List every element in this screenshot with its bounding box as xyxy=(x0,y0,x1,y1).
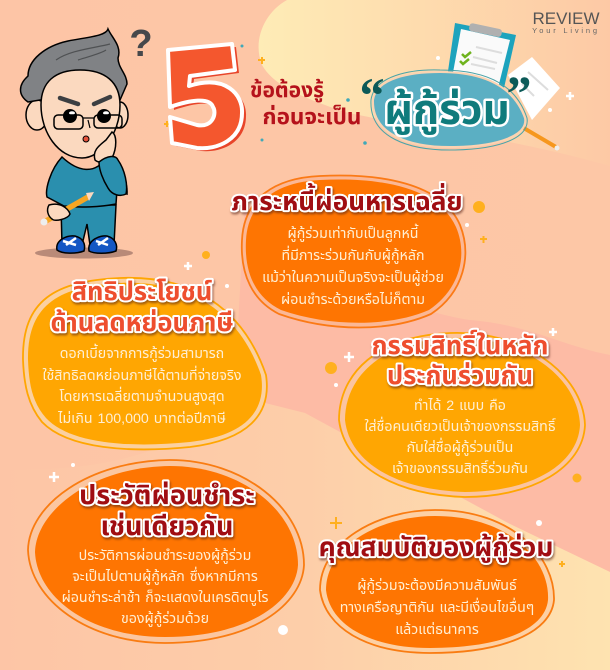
body text: จะเป็นไปตามผู้กู้หลัก ซึ่งหากมีการ xyxy=(72,566,258,585)
panel: กรรมสิทธิ์ในหลักประกันร่วมกัน xyxy=(339,330,585,497)
body text: ไม่เกิน 100,000 บาทต่อปีภาษี xyxy=(57,410,226,427)
body text: ที่มีภาระร่วมกันกับผู้กู้หลัก xyxy=(282,245,424,264)
raised arm xyxy=(99,156,127,195)
heading: สิทธิประโยชน์ xyxy=(72,278,212,306)
body text: ของผู้กู้ร่วมด้วย xyxy=(121,610,209,627)
body text xyxy=(43,343,241,427)
shadow xyxy=(35,248,133,258)
heading: ภาระหนี้ผ่อนหารเฉลี่ย xyxy=(231,183,463,216)
body text: โดยหารเฉลี่ยตามจำนวนสูงสุด xyxy=(59,386,225,405)
panel: ประวัติผ่อนชำระเช่นเดียวกัน xyxy=(28,460,304,643)
hair xyxy=(20,29,127,102)
raised hand xyxy=(94,132,116,162)
body text: แล้วแต่ธนาคาร xyxy=(395,621,479,638)
pencil xyxy=(46,197,88,221)
panel: ประวัติผ่อนชำระเช่นเดียวกัน: เช่นเดียวกัน xyxy=(101,511,233,541)
title text: ก่อนจะเป็น xyxy=(263,104,361,129)
highlighted keyword badge: “ xyxy=(360,67,384,123)
brows xyxy=(60,97,110,104)
body text xyxy=(340,577,534,638)
panel: ภาระหนี้ผ่อนหารเฉลี่ย xyxy=(231,176,465,328)
face xyxy=(41,70,120,158)
body text xyxy=(364,398,556,477)
torso xyxy=(47,157,127,207)
body text xyxy=(262,223,444,308)
mouth xyxy=(83,136,89,142)
body text: แม้ว่าในความเป็นจริงจะเป็นผู้ช่วย xyxy=(262,269,444,286)
ears xyxy=(26,100,48,130)
body text: ผู้กู้ร่วมเท่ากับเป็นลูกหนี้ xyxy=(288,223,418,242)
shoes xyxy=(57,236,85,253)
body text: ผู้กู้ร่วมจะต้องมีความสัมพันธ์ xyxy=(357,577,517,594)
body text: ผ่อนชำระล่าช้า ก็จะแสดงในเครดิตบูโร xyxy=(62,589,268,606)
panel: คุณสมบัติของผู้กู้ร่วม xyxy=(319,510,554,653)
body text: ผ่อนชำระด้วยหรือไม่ก็ตาม xyxy=(281,291,425,308)
decorative sparkles and dots xyxy=(49,44,582,635)
panel: สิทธิประโยชน์ด้านลดหย่อนภาษี xyxy=(23,278,267,449)
body text: ดอกเบี้ยจากการกู้ร่วมสามารถ xyxy=(60,343,224,362)
highlighted keyword badge: ” xyxy=(506,65,532,121)
body text: ทำได้ 2 แบบ คือ xyxy=(414,398,506,414)
character: thinking man xyxy=(20,23,153,258)
body text: ใส่ชื่อคนเดียวเป็นเจ้าของกรรมสิทธิ์ xyxy=(364,416,556,435)
title text: ข้อต้องรู้ xyxy=(250,79,324,103)
logo: Review Your Living: REVIEW xyxy=(532,9,600,28)
body text: ใช้สิทธิลดหย่อนภาษีได้ตามที่จ่ายจริง xyxy=(43,365,241,384)
body text: เจ้าของกรรมสิทธิ์ร่วมกัน xyxy=(392,460,528,477)
panel: กรรมสิทธิ์ในหลักประกันร่วมกัน: ประกันร่วมกัน xyxy=(387,362,533,390)
logo: Review Your Living: Your Living xyxy=(532,26,600,35)
heading: ประวัติผ่อนชำระ xyxy=(79,480,255,510)
body text: ประวัติการผ่อนชำระของผู้กู้ร่วม xyxy=(79,547,251,564)
panel: สิทธิประโยชน์ด้านลดหย่อนภาษี: ด้านลดหย่อนภาษี xyxy=(50,309,234,337)
highlighted keyword badge xyxy=(360,65,532,150)
heading: คุณสมบัติของผู้กู้ร่วม xyxy=(319,532,553,563)
body text: ทางเครือญาติกัน และมีเงื่อนไขอื่นๆ xyxy=(340,597,534,616)
clipboard illustration xyxy=(447,23,560,151)
question mark: ? xyxy=(129,23,153,65)
highlighted keyword badge: ผู้กู้ร่วม xyxy=(384,86,510,135)
legs xyxy=(61,205,116,245)
hand xyxy=(48,204,70,220)
big number 5 xyxy=(168,44,246,151)
body text xyxy=(62,547,268,627)
body text: กับใส่ชื่อผู้กู้ร่วมเป็น xyxy=(407,437,513,456)
eyes and glasses xyxy=(63,109,77,123)
title text xyxy=(250,79,361,129)
heading: กรรมสิทธิ์ในหลัก xyxy=(372,330,548,360)
